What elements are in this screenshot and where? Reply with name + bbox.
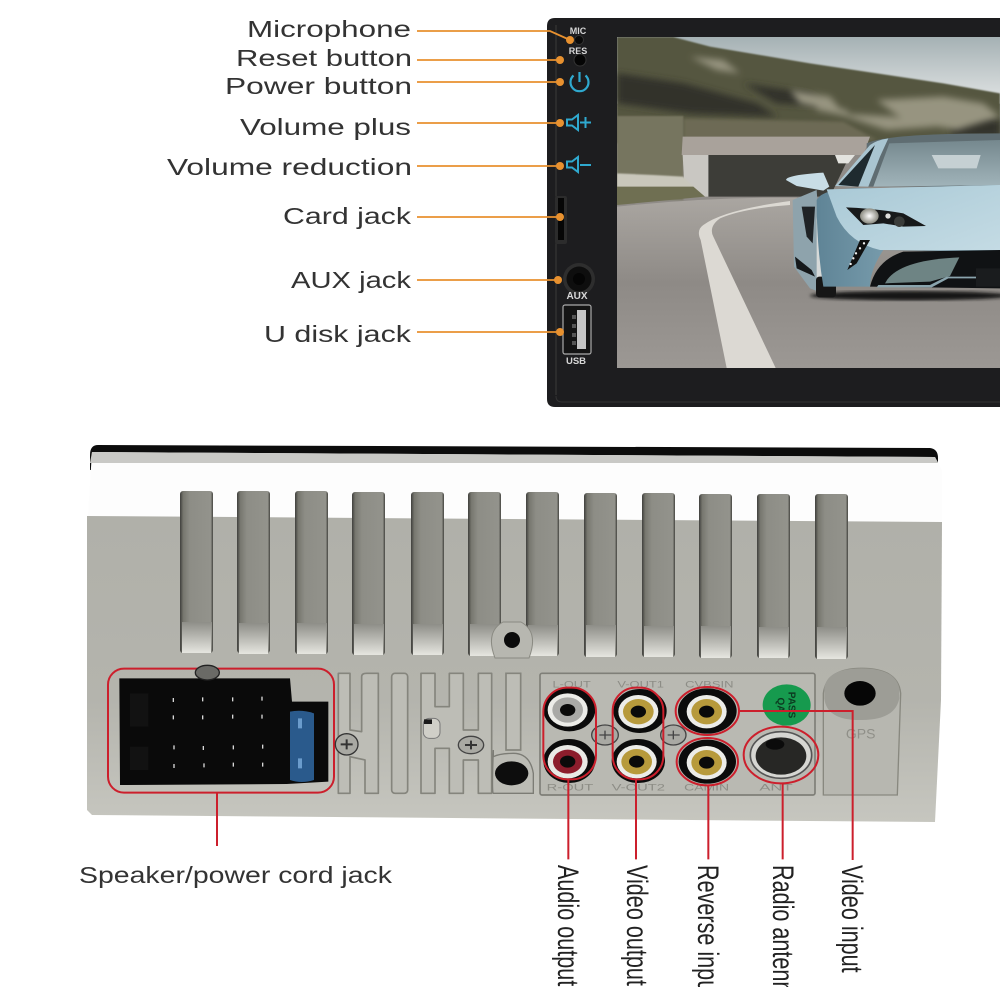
screws: [592, 725, 686, 745]
screws: [195, 665, 484, 755]
bridge: [682, 137, 870, 155]
screw hole boss: [491, 622, 533, 658]
leader: speaker connector: [216, 793, 218, 846]
silk labels: [547, 679, 793, 793]
icon: card slot: [555, 196, 567, 244]
label: Audio output: Audio output: [551, 865, 586, 987]
callout: Card jack: Card jack: [283, 203, 412, 229]
connector plate and jacks: [492, 668, 901, 860]
GPS port: GPS: [846, 725, 875, 741]
silk labels: V-OUT2: [612, 783, 665, 793]
callout: Power button: Power button: [225, 73, 412, 99]
silk labels: L-OUT: [552, 679, 591, 689]
QA pass sticker: [763, 684, 811, 726]
icon: AUX jack: AUX: [566, 291, 588, 302]
vent outlines: [338, 673, 492, 793]
callout: AUX jack: [291, 267, 562, 293]
icon: AUX jack: [563, 263, 595, 302]
red outlines and leader lines: [543, 687, 853, 860]
QA pass sticker: QA: [774, 698, 785, 712]
callout: Volume reduction: Volume reduction: [167, 154, 412, 180]
panel: front head unit: [547, 18, 1000, 407]
icon: power button: [570, 72, 588, 91]
panel: rear chassis: [87, 445, 942, 860]
callout: Volume plus: [240, 114, 564, 140]
silk labels: CVBSIN: [685, 679, 733, 689]
connector block and vents: [108, 665, 492, 793]
jack plate: [540, 673, 815, 795]
label: Video output: Video output: [620, 865, 655, 986]
callout: U disk jack: U disk jack: [264, 321, 412, 347]
silk labels: CAMIN: [684, 783, 729, 793]
label: Video input: Video input: [835, 865, 870, 973]
rotated port labels: [552, 865, 864, 987]
icon: volume plus: [567, 115, 591, 130]
icon: MIC label and hole: [570, 26, 587, 44]
screen photo: car on mountain road: [617, 37, 1000, 368]
car: [786, 133, 1000, 300]
icon: MIC label and hole: MIC: [570, 26, 587, 36]
silk labels: ANT: [759, 783, 793, 793]
heat sink slots: [180, 491, 848, 659]
callout: Microphone: [247, 16, 574, 44]
vent right: [506, 673, 521, 750]
RCA jack audio L: [543, 687, 595, 731]
icon: USB port: USB: [566, 356, 586, 367]
QA pass sticker: PASS: [785, 692, 796, 719]
icon: volume minus: [567, 157, 591, 172]
silk labels: R-OUT: [547, 783, 594, 793]
label: Reverse input: Reverse input: [691, 865, 726, 999]
speaker connector red outline: [108, 669, 334, 793]
keyhole: [423, 718, 440, 738]
icon: RES label and hole: [569, 46, 587, 66]
road: [617, 198, 1000, 368]
RCA jack video in: [678, 688, 737, 734]
callout: Microphone: Microphone: [247, 16, 411, 42]
callout: Volume reduction: [167, 154, 564, 180]
callout: Card jack: [283, 203, 564, 229]
GPS port: [823, 668, 901, 795]
RCA jack audio R: [543, 739, 595, 783]
icon: USB port: [563, 305, 591, 367]
callout: Reset button: Reset button: [236, 45, 412, 71]
RCA jack video out 2: [612, 739, 665, 783]
connector body: [119, 678, 328, 785]
RCA jack video out 1: [613, 689, 667, 733]
silk labels: V-OUT1: [617, 679, 664, 689]
callout: AUX jack: AUX jack: [291, 267, 412, 293]
callout: Reset button: [236, 45, 564, 71]
callout: Power button: [225, 73, 564, 99]
callout: U disk jack: [264, 321, 564, 347]
small jack left: [492, 750, 533, 793]
label: Speaker/power cord jack: Speaker/power cord jack: [79, 862, 393, 888]
icon: RES label and hole: RES: [569, 46, 587, 56]
RCA jack camera in: [679, 740, 736, 784]
antenna socket: [750, 732, 812, 778]
callout: Volume plus: Volume plus: [240, 114, 411, 140]
